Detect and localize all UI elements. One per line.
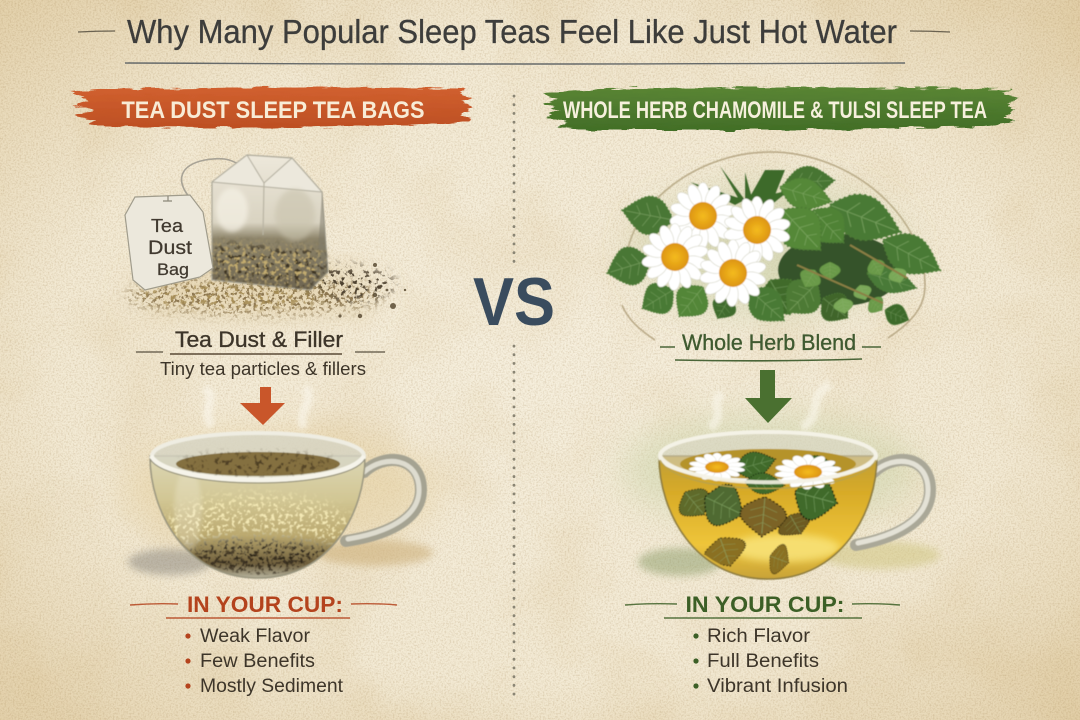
heading banner: tea dust: TEA DUST SLEEP TEA BAGS xyxy=(122,97,424,124)
list: in your cup (tea dust): Mostly Sediment xyxy=(200,676,344,697)
arrow: green down xyxy=(745,370,792,423)
list: in your cup (whole herb): Full Benefits xyxy=(707,651,819,672)
tea bag tag: Tea xyxy=(151,216,184,236)
heading banner: tea dust xyxy=(70,87,474,128)
centre dotted divider xyxy=(513,96,515,696)
list: in your cup (tea dust): Few Benefits xyxy=(200,651,315,672)
icon: herb bouquet with chamomile xyxy=(601,152,949,340)
chamomile flowers xyxy=(641,182,791,307)
heading banner: whole herb xyxy=(543,87,1018,130)
list: in your cup (whole herb): IN YOUR CUP: xyxy=(686,592,844,617)
tea bag tag: Bag xyxy=(157,260,189,279)
steam: right cup xyxy=(710,384,830,428)
VS badge: VS xyxy=(473,264,555,340)
icon: cup with herbal infusion xyxy=(638,432,940,579)
list: in your cup (whole herb): Rich Flavor xyxy=(707,626,811,647)
list: in your cup (tea dust) xyxy=(130,592,397,697)
description: tiny particles: Tiny tea particles & fillers xyxy=(160,359,366,379)
tea bag tag xyxy=(125,195,213,290)
tea bag pouch xyxy=(212,155,328,290)
subheading: whole herb blend: Whole Herb Blend xyxy=(682,330,856,355)
panel: tea dust sleep tea bags xyxy=(70,87,474,697)
title: Why Many Popular Sleep Teas Feel Like Just Hot Water xyxy=(127,13,897,50)
steam: left cup xyxy=(205,388,308,428)
panel: whole herb sleep tea xyxy=(543,87,1018,697)
arrow: orange down xyxy=(240,387,285,425)
tea bag tag: Dust xyxy=(148,238,193,259)
icon: tea bag with spilled dust xyxy=(125,155,406,318)
list: in your cup (whole herb): Vibrant Infusion xyxy=(707,676,848,697)
list: in your cup (tea dust): Weak Flavor xyxy=(200,626,311,647)
icon: cup with sediment xyxy=(128,433,433,578)
subheading: tea dust & filler: Tea Dust & Filler xyxy=(175,327,343,352)
list: in your cup (whole herb) xyxy=(625,592,900,697)
list: in your cup (tea dust): IN YOUR CUP: xyxy=(187,592,343,617)
